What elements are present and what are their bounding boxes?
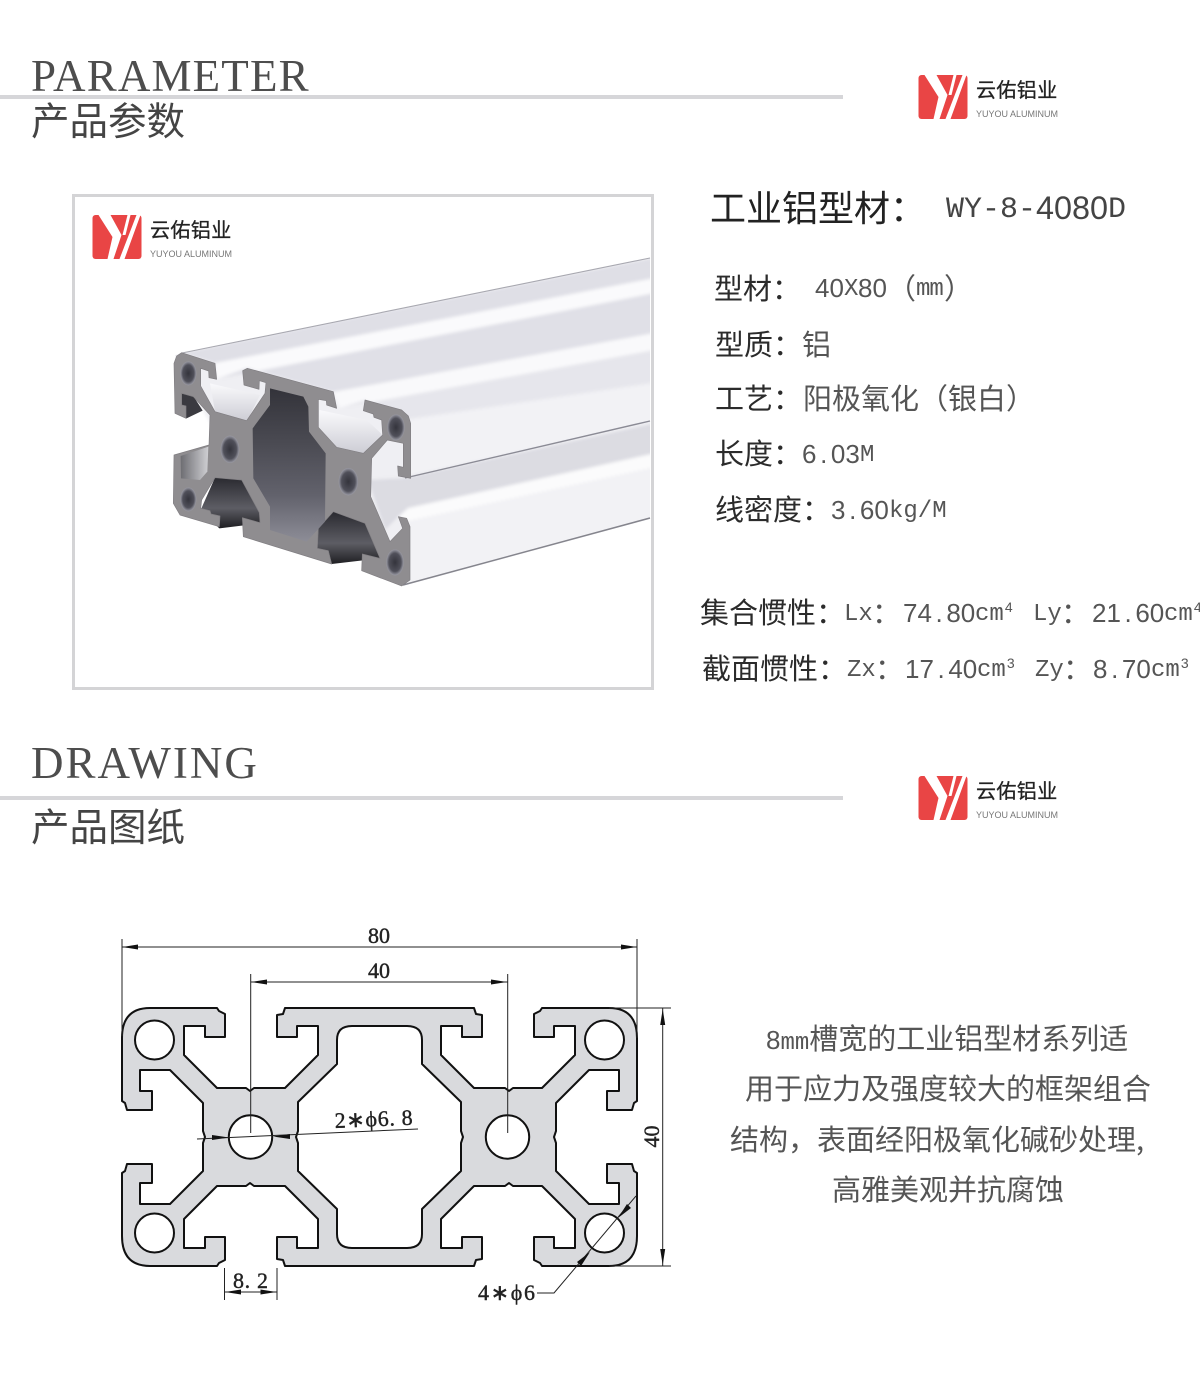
dimension: spacing 40: 40	[368, 958, 390, 983]
logo: top right: YUYOU ALUMINUM	[976, 109, 1058, 119]
screw holes	[180, 361, 196, 385]
technical drawing: 4080 cross section	[121, 923, 671, 1305]
spec: finish: 工艺：	[715, 376, 802, 418]
logo: on photo: 云佑铝业	[150, 214, 232, 243]
spec: section modulus: cm3	[1151, 655, 1189, 684]
spec: moment of inertia: ：	[1061, 590, 1090, 632]
illustration: extruded aluminium profile	[173, 258, 650, 586]
base of the extrusion	[175, 353, 403, 541]
spec: section modulus: Zx	[847, 657, 876, 684]
spec: section modulus: Zy	[1035, 657, 1064, 684]
dimension: slot 8.2: 8. 2	[233, 1268, 268, 1293]
dimension: corner hole 4*φ6: 4∗ϕ6	[478, 1280, 535, 1305]
spec: section modulus	[702, 646, 1189, 688]
spec: moment of inertia: 集合惯性：	[700, 590, 845, 632]
spec: profile size	[714, 266, 973, 308]
spec: moment of inertia: Lx	[844, 601, 873, 628]
dimension: slot 8.2	[224, 1268, 277, 1300]
heading: DRAWING: DRAWING	[31, 738, 259, 788]
spec: profile size: X	[844, 276, 858, 303]
spec: finish: 阳极氧化（银白）	[803, 376, 1035, 418]
product title: WY-8-	[946, 193, 1036, 227]
spec: section modulus: 8.70	[1093, 654, 1151, 684]
top centre face	[217, 292, 660, 392]
spec: section modulus: ：	[875, 646, 904, 688]
upper right top face	[354, 354, 650, 416]
central cavity	[253, 388, 326, 542]
spec: section modulus: ：	[1063, 646, 1092, 688]
logo: drawing section: 云佑铝业	[976, 775, 1058, 804]
spec: moment of inertia: cm4	[975, 599, 1013, 628]
dimension: hole 2*φ6.8: 2∗ϕ6. 8	[334, 1105, 413, 1133]
spec: linear density: 线密度：	[715, 487, 831, 529]
description paragraph	[730, 1016, 1151, 1209]
panel: product photo	[72, 194, 654, 690]
spec: profile size: ）	[944, 266, 973, 308]
spec: profile size: （	[887, 266, 916, 308]
dimension: spacing 40	[251, 958, 508, 1133]
white strip lower	[399, 455, 650, 520]
spec: length	[715, 431, 874, 473]
gap between rails	[368, 422, 660, 530]
spec: profile size: 型材：	[714, 266, 801, 308]
line 2: 用于应力及强度较大的框架组合	[745, 1066, 1151, 1108]
product title: 工业铝型材：	[710, 180, 926, 232]
spec: linear density: 3.60	[831, 495, 889, 525]
spec: moment of inertia	[700, 590, 1200, 632]
holes	[135, 1020, 624, 1252]
lower left slot	[181, 447, 208, 480]
line 1: 8mm槽宽的工业铝型材系列适	[766, 1016, 1128, 1058]
white strip	[215, 277, 660, 379]
divider rule	[0, 95, 843, 99]
spec: moment of inertia: ：	[872, 590, 901, 632]
spec: length: 长度：	[715, 431, 802, 473]
logo: drawing section	[918, 775, 1058, 820]
spec: profile size: mm	[916, 276, 943, 303]
heading: 产品参数: 产品参数	[31, 91, 185, 147]
spec: linear density: kg/M	[889, 498, 947, 525]
lower side face	[403, 466, 660, 590]
spec: profile size: 80	[858, 273, 887, 303]
profile outline	[122, 1008, 637, 1266]
section header: drawing	[0, 738, 843, 853]
logo: on photo	[92, 214, 232, 259]
product title: D	[1108, 193, 1126, 227]
spec: section modulus: cm3	[977, 655, 1015, 684]
spec: section modulus: 17.40	[905, 654, 977, 684]
dark lower slots	[201, 478, 260, 528]
logo: drawing section: YUYOU ALUMINUM	[976, 810, 1058, 820]
dimension: height 40: 40	[639, 1126, 664, 1148]
dimension: height 40	[609, 1008, 671, 1266]
product title: 4080	[1036, 190, 1108, 226]
dimension: corner hole 4*φ6	[478, 1196, 636, 1305]
dimension: width 80	[122, 923, 637, 1038]
section header: parameter	[0, 51, 843, 147]
heading: PARAMETER: PARAMETER	[31, 51, 310, 101]
spec: moment of inertia: Ly	[1033, 601, 1062, 628]
logo: top right: 云佑铝业	[976, 74, 1058, 103]
spec: profile size: 40	[815, 273, 844, 303]
dimension: hole 2*φ6.8	[197, 1105, 418, 1140]
spec: linear density	[715, 487, 947, 529]
dark upper left slot	[181, 393, 203, 419]
line 3: 结构，表面经阳极氧化碱砂处理,	[730, 1117, 1144, 1159]
spec: material: 铝	[802, 322, 831, 364]
spec: material: 型质：	[715, 322, 802, 364]
white strip centre	[336, 335, 650, 406]
front face	[173, 353, 411, 586]
dimension: width 80: 80	[368, 923, 390, 948]
upper right side face	[403, 382, 660, 478]
inner slot walls	[210, 383, 260, 421]
spec: length: 6.03	[802, 439, 860, 469]
top bevel band	[182, 256, 660, 363]
line 4: 高雅美观并抗腐蚀	[832, 1167, 1064, 1209]
spec: moment of inertia: 74.80	[903, 598, 975, 628]
heading: 产品图纸: 产品图纸	[31, 797, 185, 853]
spec: length: M	[860, 442, 874, 469]
divider rule	[0, 796, 843, 800]
product title	[710, 180, 1126, 232]
spec: section modulus: 截面惯性：	[702, 646, 847, 688]
spec: moment of inertia: 21.60	[1092, 598, 1164, 628]
logo: top right	[918, 74, 1058, 119]
logo: on photo: YUYOU ALUMINUM	[150, 249, 232, 259]
